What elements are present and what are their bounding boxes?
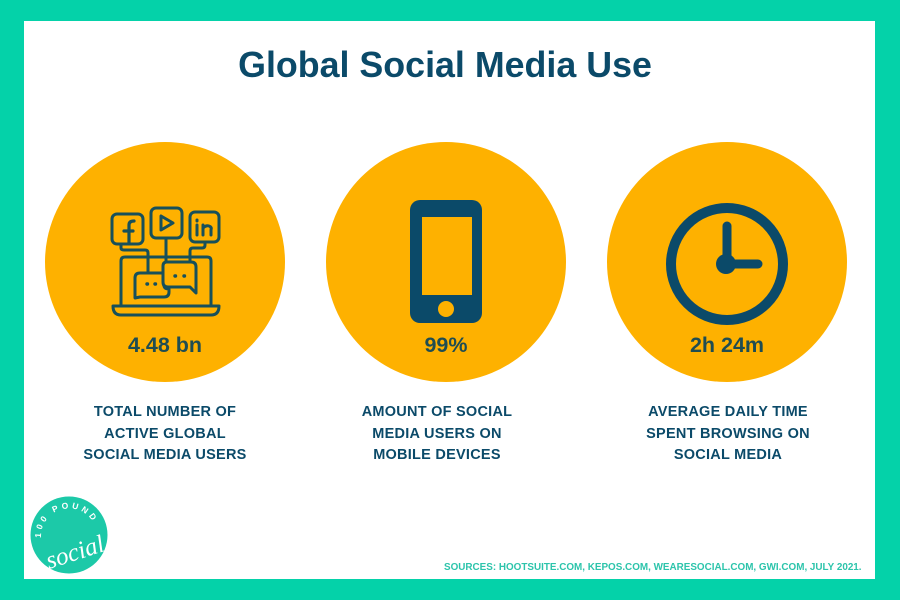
caption: users: SOCIAL MEDIA USERS <box>83 447 247 463</box>
stat: users: 4.48 bn <box>128 333 202 357</box>
caption: time <box>646 404 810 463</box>
icon: smartphone <box>410 200 482 323</box>
stat: time: 2h 24m <box>690 333 764 357</box>
caption: users <box>83 404 247 463</box>
logo: 100 Pound Social: 100 POUND <box>35 502 96 538</box>
sources: SOURCES: HOOTSUITE.COM, KEPOS.COM, WEARESOCIAL.COM, GWI.COM, JULY 2021. <box>444 562 862 573</box>
caption: time: SOCIAL MEDIA <box>674 447 782 463</box>
caption: mobile <box>362 404 512 463</box>
caption: users: TOTAL NUMBER OF <box>94 404 236 420</box>
icon: laptop with social apps <box>112 208 219 315</box>
title: Global Social Media Use <box>238 45 652 85</box>
circle: mobile <box>326 142 566 382</box>
circle: time <box>607 142 847 382</box>
logo: 100 Pound Social <box>30 496 108 575</box>
circle: users <box>45 142 285 382</box>
stat: mobile: 99% <box>424 333 468 357</box>
logo: 100 Pound Social: social <box>43 531 108 575</box>
caption: mobile: AMOUNT OF SOCIAL <box>362 404 512 420</box>
caption: mobile: MEDIA USERS ON <box>372 426 502 442</box>
caption: time: SPENT BROWSING ON <box>646 426 810 442</box>
caption: users: ACTIVE GLOBAL <box>104 426 226 442</box>
caption: mobile: MOBILE DEVICES <box>373 447 501 463</box>
icon: clock <box>671 208 783 320</box>
caption: time: AVERAGE DAILY TIME <box>648 404 808 420</box>
